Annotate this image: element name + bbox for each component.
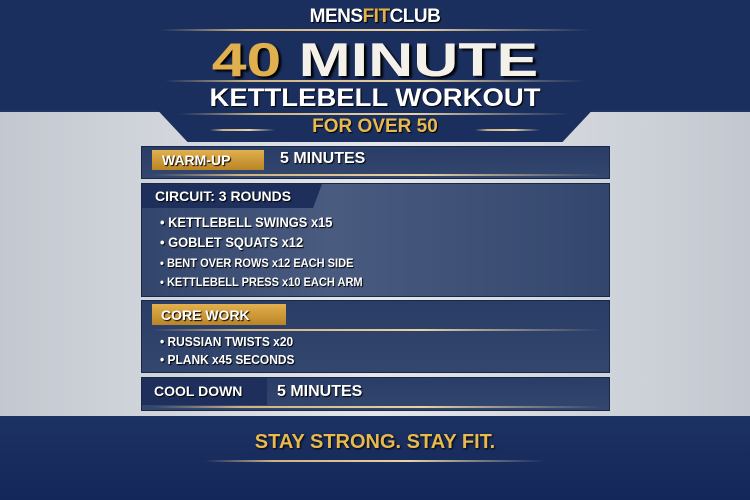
label: core work [152,304,286,325]
background light band [0,112,750,416]
text: 5 minutes: 5 MINUTES [277,383,362,400]
list: core exercises [160,334,296,367]
panel: cool down [141,377,610,411]
list: circuit exercises: BENT OVER ROWS x12 EACH SIDE [167,256,353,270]
brand: MENSFITCLUB [310,6,440,27]
footer slogan: STAY STRONG. STAY FIT. [255,431,495,453]
panel: core work [141,300,610,373]
heading: circuit: CIRCUIT: 3 ROUNDS [155,188,291,204]
label: warm-up: WARM-UP [162,152,230,168]
label: core work: CORE WORK [161,307,250,323]
footer band [0,416,750,500]
panel: circuit [141,183,610,297]
list: core exercises: RUSSIAN TWISTS x20 [168,334,293,349]
list: circuit exercises: KETTLEBELL PRESS x10 EACH ARM [167,275,363,289]
list: circuit exercises: GOBLET SQUATS x12 [168,234,303,250]
background top [0,0,750,112]
header banner [160,112,590,142]
panel: warm-up [141,146,610,179]
text: 5 minutes: 5 MINUTES [280,150,365,167]
list: circuit exercises: KETTLEBELL SWINGS x15 [168,214,332,230]
title: 40 minute: 40 MINUTE [212,33,538,86]
heading: circuit [142,184,322,208]
list: core exercises: PLANK x45 SECONDS [168,352,294,367]
subtitle: KETTLEBELL WORKOUT [210,84,540,112]
label: cool down: COOL DOWN [154,383,242,399]
label: cool down [142,378,267,405]
label: warm-up [152,150,264,170]
list: circuit exercises [160,214,364,289]
tagline for over 50: FOR OVER 50 [312,116,438,137]
